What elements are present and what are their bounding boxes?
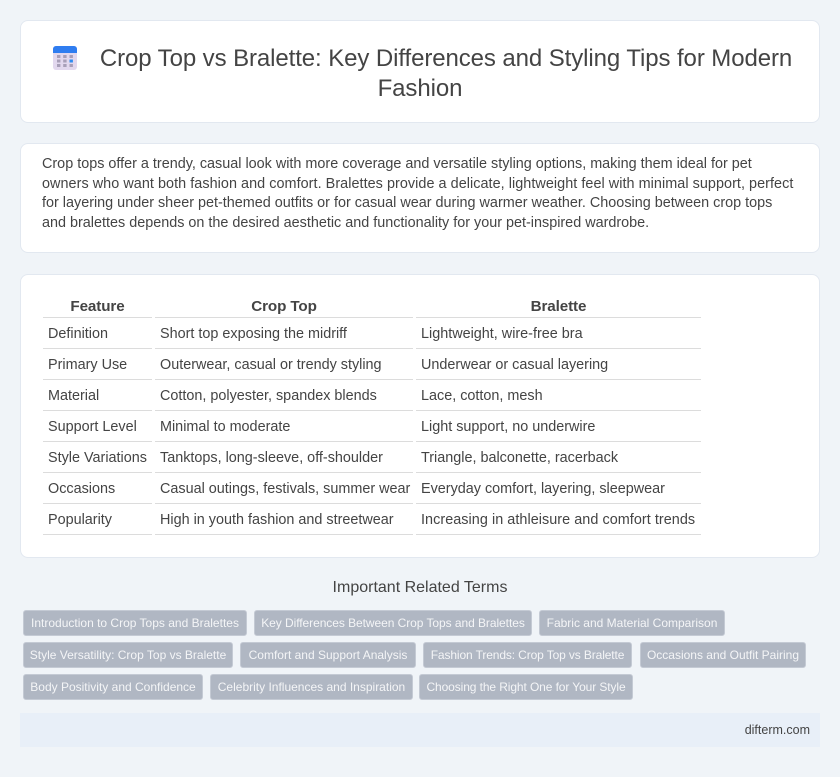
row: occasions: Occasions [48, 481, 115, 497]
row: material: Material [48, 388, 99, 404]
row: material [43, 388, 701, 411]
row: popularity: High in youth fashion and streetwear [160, 512, 394, 528]
row: definition: Lightweight, wire-free bra [421, 326, 583, 342]
title: Crop Top vs Bralette: Key Differences and Styling Tips for Modern [100, 45, 792, 72]
row: style variations: Tanktops, long-sleeve, off-shoulder [160, 450, 383, 466]
tag [23, 674, 203, 700]
tag [419, 674, 633, 700]
tag [23, 610, 247, 636]
tag: Fabric and Material Comparison [547, 616, 717, 630]
table header: Feature [70, 298, 125, 315]
row: popularity: Popularity [48, 512, 112, 528]
row: definition: Short top exposing the midriff [160, 326, 347, 342]
row: support level: Support Level [48, 419, 137, 435]
table header [43, 298, 701, 318]
tag: Celebrity Influences and Inspiration [218, 680, 405, 694]
row: support level: Minimal to moderate [160, 419, 290, 435]
text block: introduction: owners who want both fashion and comfort. Bralettes provide a delicate, lightweight feel with minimal support, perfect [42, 176, 793, 192]
row: style variations: Triangle, balconette, racerback [421, 450, 618, 466]
row: material: Lace, cotton, mesh [421, 388, 543, 404]
tag: Choosing the Right One for Your Style [426, 680, 626, 694]
tag [23, 642, 233, 668]
tag: Body Positivity and Confidence [30, 680, 196, 694]
tag: Style Versatility: Crop Top vs Bralette [30, 648, 226, 662]
tag [539, 610, 725, 636]
row: occasions: Casual outings, festivals, summer wear [160, 481, 410, 497]
tag: Introduction to Crop Tops and Bralettes [31, 616, 239, 630]
row: primary use: Outerwear, casual or trendy styling [160, 357, 382, 373]
table header: Crop Top [251, 298, 317, 315]
icon: calendar [53, 46, 77, 70]
title: Fashion [378, 74, 462, 102]
table header: Bralette [531, 298, 586, 315]
footer credit: difterm.com [745, 723, 810, 737]
heading: important related terms: Important Related Terms [333, 579, 507, 596]
text block: introduction: and bralettes depends on the desired aesthetic and functionality for your pet-inspired wardrobe. [42, 214, 649, 230]
panel: introduction [20, 143, 820, 253]
row: occasions [43, 481, 701, 504]
tag [423, 642, 632, 668]
tag: Occasions and Outfit Pairing [647, 648, 799, 662]
tag [640, 642, 806, 668]
row: style variations: Style Variations [48, 450, 147, 466]
row: definition: Definition [48, 326, 108, 342]
row: support level [43, 419, 701, 442]
tag: Comfort and Support Analysis [249, 648, 407, 662]
row: popularity [43, 512, 701, 535]
table: comparison [43, 298, 701, 535]
panel: header [20, 20, 820, 123]
tag [210, 674, 413, 700]
text block: introduction [42, 156, 794, 230]
row: primary use: Primary Use [48, 357, 127, 373]
text block: introduction: for layering under sheer pet-themed outfits or for casual wear during warmer weather. Choosing between crop tops [42, 195, 772, 211]
tag [254, 610, 532, 636]
row: primary use: Underwear or casual layering [421, 357, 608, 373]
row: primary use [43, 357, 701, 380]
row: style variations [43, 450, 701, 473]
text block: introduction: Crop tops offer a trendy, casual look with more coverage and versatile styling options, making them ideal for pet [42, 156, 752, 172]
title [100, 45, 792, 102]
row: popularity: Increasing in athleisure and comfort trends [421, 512, 695, 528]
row: definition [43, 326, 701, 349]
row: support level: Light support, no underwire [421, 419, 595, 435]
tag: Key Differences Between Crop Tops and Bralettes [261, 616, 525, 630]
row: occasions: Everyday comfort, layering, sleepwear [421, 481, 665, 497]
tag [240, 642, 416, 668]
footer [20, 713, 820, 747]
panel: comparison table [20, 274, 820, 558]
tags: related terms [23, 610, 806, 700]
tag: Fashion Trends: Crop Top vs Bralette [431, 648, 624, 662]
row: material: Cotton, polyester, spandex blends [160, 388, 377, 404]
